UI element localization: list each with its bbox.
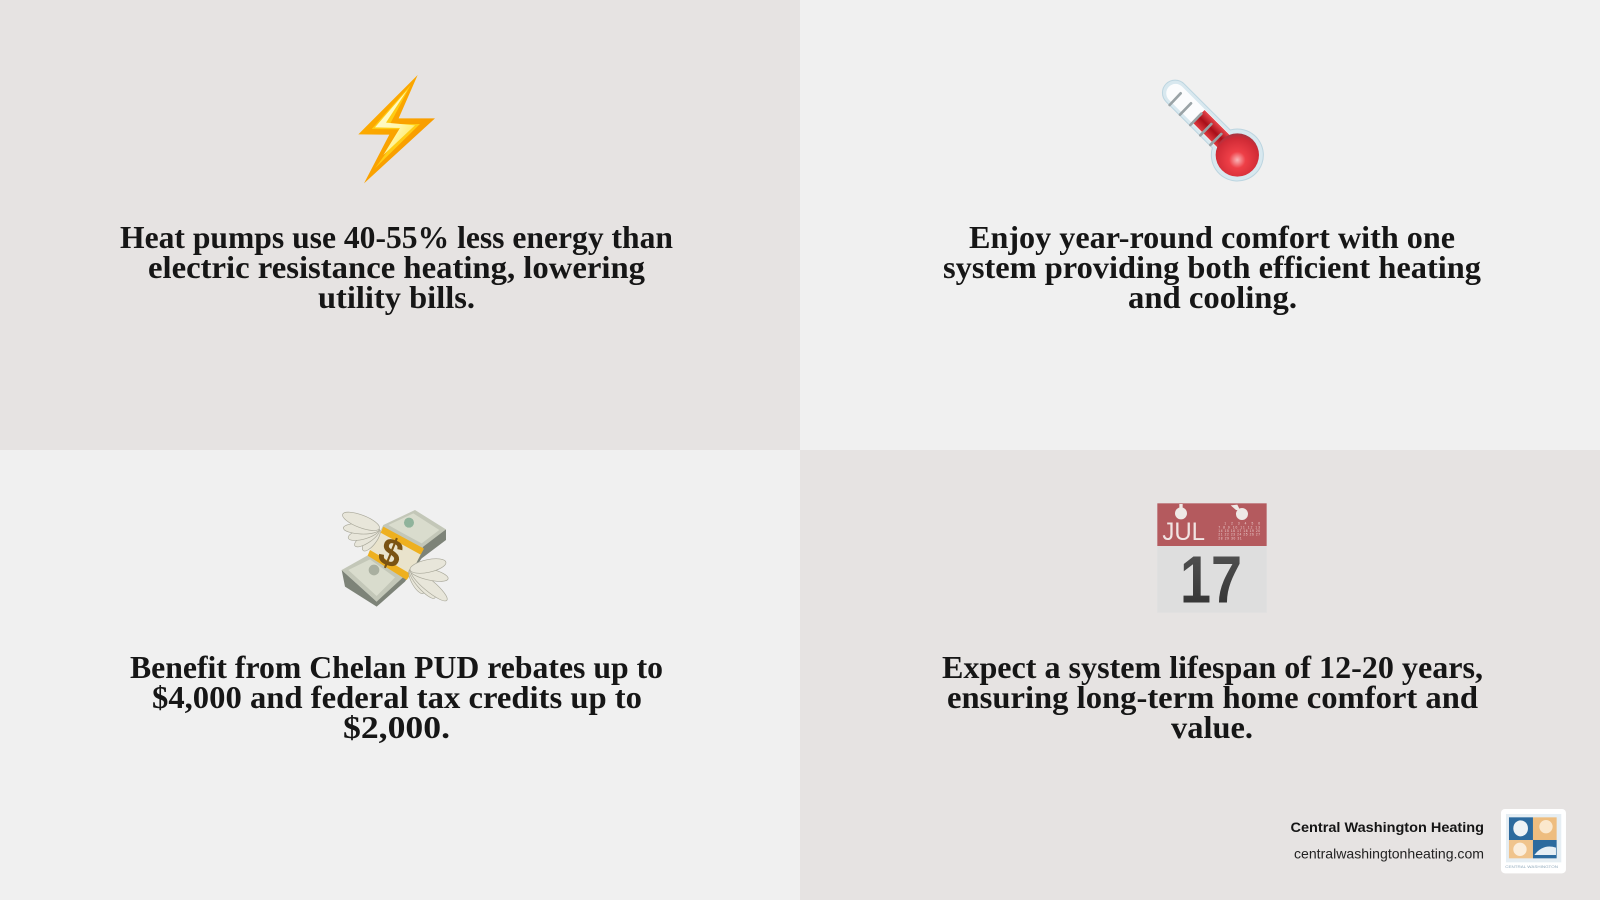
text: rebates and credits: $2,000.	[343, 709, 450, 745]
text: energy savings: utility bills.	[318, 279, 475, 315]
footer website: centralwashingtonheating.com	[1294, 846, 1484, 862]
text: rebates and credits	[130, 649, 663, 745]
panel: year-round comfort	[800, 0, 1600, 450]
text: rebates and credits: $4,000 and federal tax credits up to	[152, 679, 642, 715]
panel: energy savings	[0, 0, 800, 450]
icon: calendar: 1 2 3 4 5 6	[1224, 522, 1260, 526]
text: year-round comfort	[943, 219, 1481, 315]
icon: calendar: 28 29 30 31	[1218, 536, 1242, 540]
logo: CENTRAL WASHINGTON	[1505, 864, 1558, 869]
text: year-round comfort: and cooling.	[1128, 279, 1297, 315]
icon: lightning bolt	[358, 75, 435, 183]
text: system lifespan	[942, 649, 1483, 745]
panel: rebates and credits	[0, 450, 800, 900]
icon: calendar: JUL	[1162, 518, 1205, 546]
text: year-round comfort: Enjoy year-round comfort with one	[969, 219, 1455, 255]
text: system lifespan: value.	[1171, 709, 1253, 745]
panel: system lifespan	[800, 450, 1600, 900]
text: energy savings: Heat pumps use 40-55% less energy than	[120, 219, 673, 255]
icon: calendar: 7 8 9 10 11 12 13	[1218, 525, 1260, 529]
text: year-round comfort: system providing both efficient heating	[943, 249, 1481, 285]
icon: calendar: 17	[1180, 543, 1242, 617]
icon: money with wings	[340, 508, 451, 607]
icon: money with wings: $	[372, 529, 409, 578]
icon: thermometer	[1148, 65, 1274, 192]
icon: calendar	[1157, 503, 1267, 617]
footer brand name: Central Washington Heating	[1290, 819, 1484, 835]
text: system lifespan: Expect a system lifespan of 12-20 years,	[942, 649, 1483, 685]
text: system lifespan: ensuring long-term home comfort and	[947, 679, 1478, 715]
logo	[1501, 809, 1566, 873]
text: energy savings	[120, 219, 673, 315]
icon: calendar: 21 22 23 24 25 26 27	[1218, 533, 1260, 537]
text: energy savings: electric resistance heating, lowering	[148, 249, 645, 285]
icon: calendar: 14 15 16 17 18 19 20	[1218, 529, 1260, 533]
text: rebates and credits: Benefit from Chelan PUD rebates up to	[130, 649, 663, 685]
